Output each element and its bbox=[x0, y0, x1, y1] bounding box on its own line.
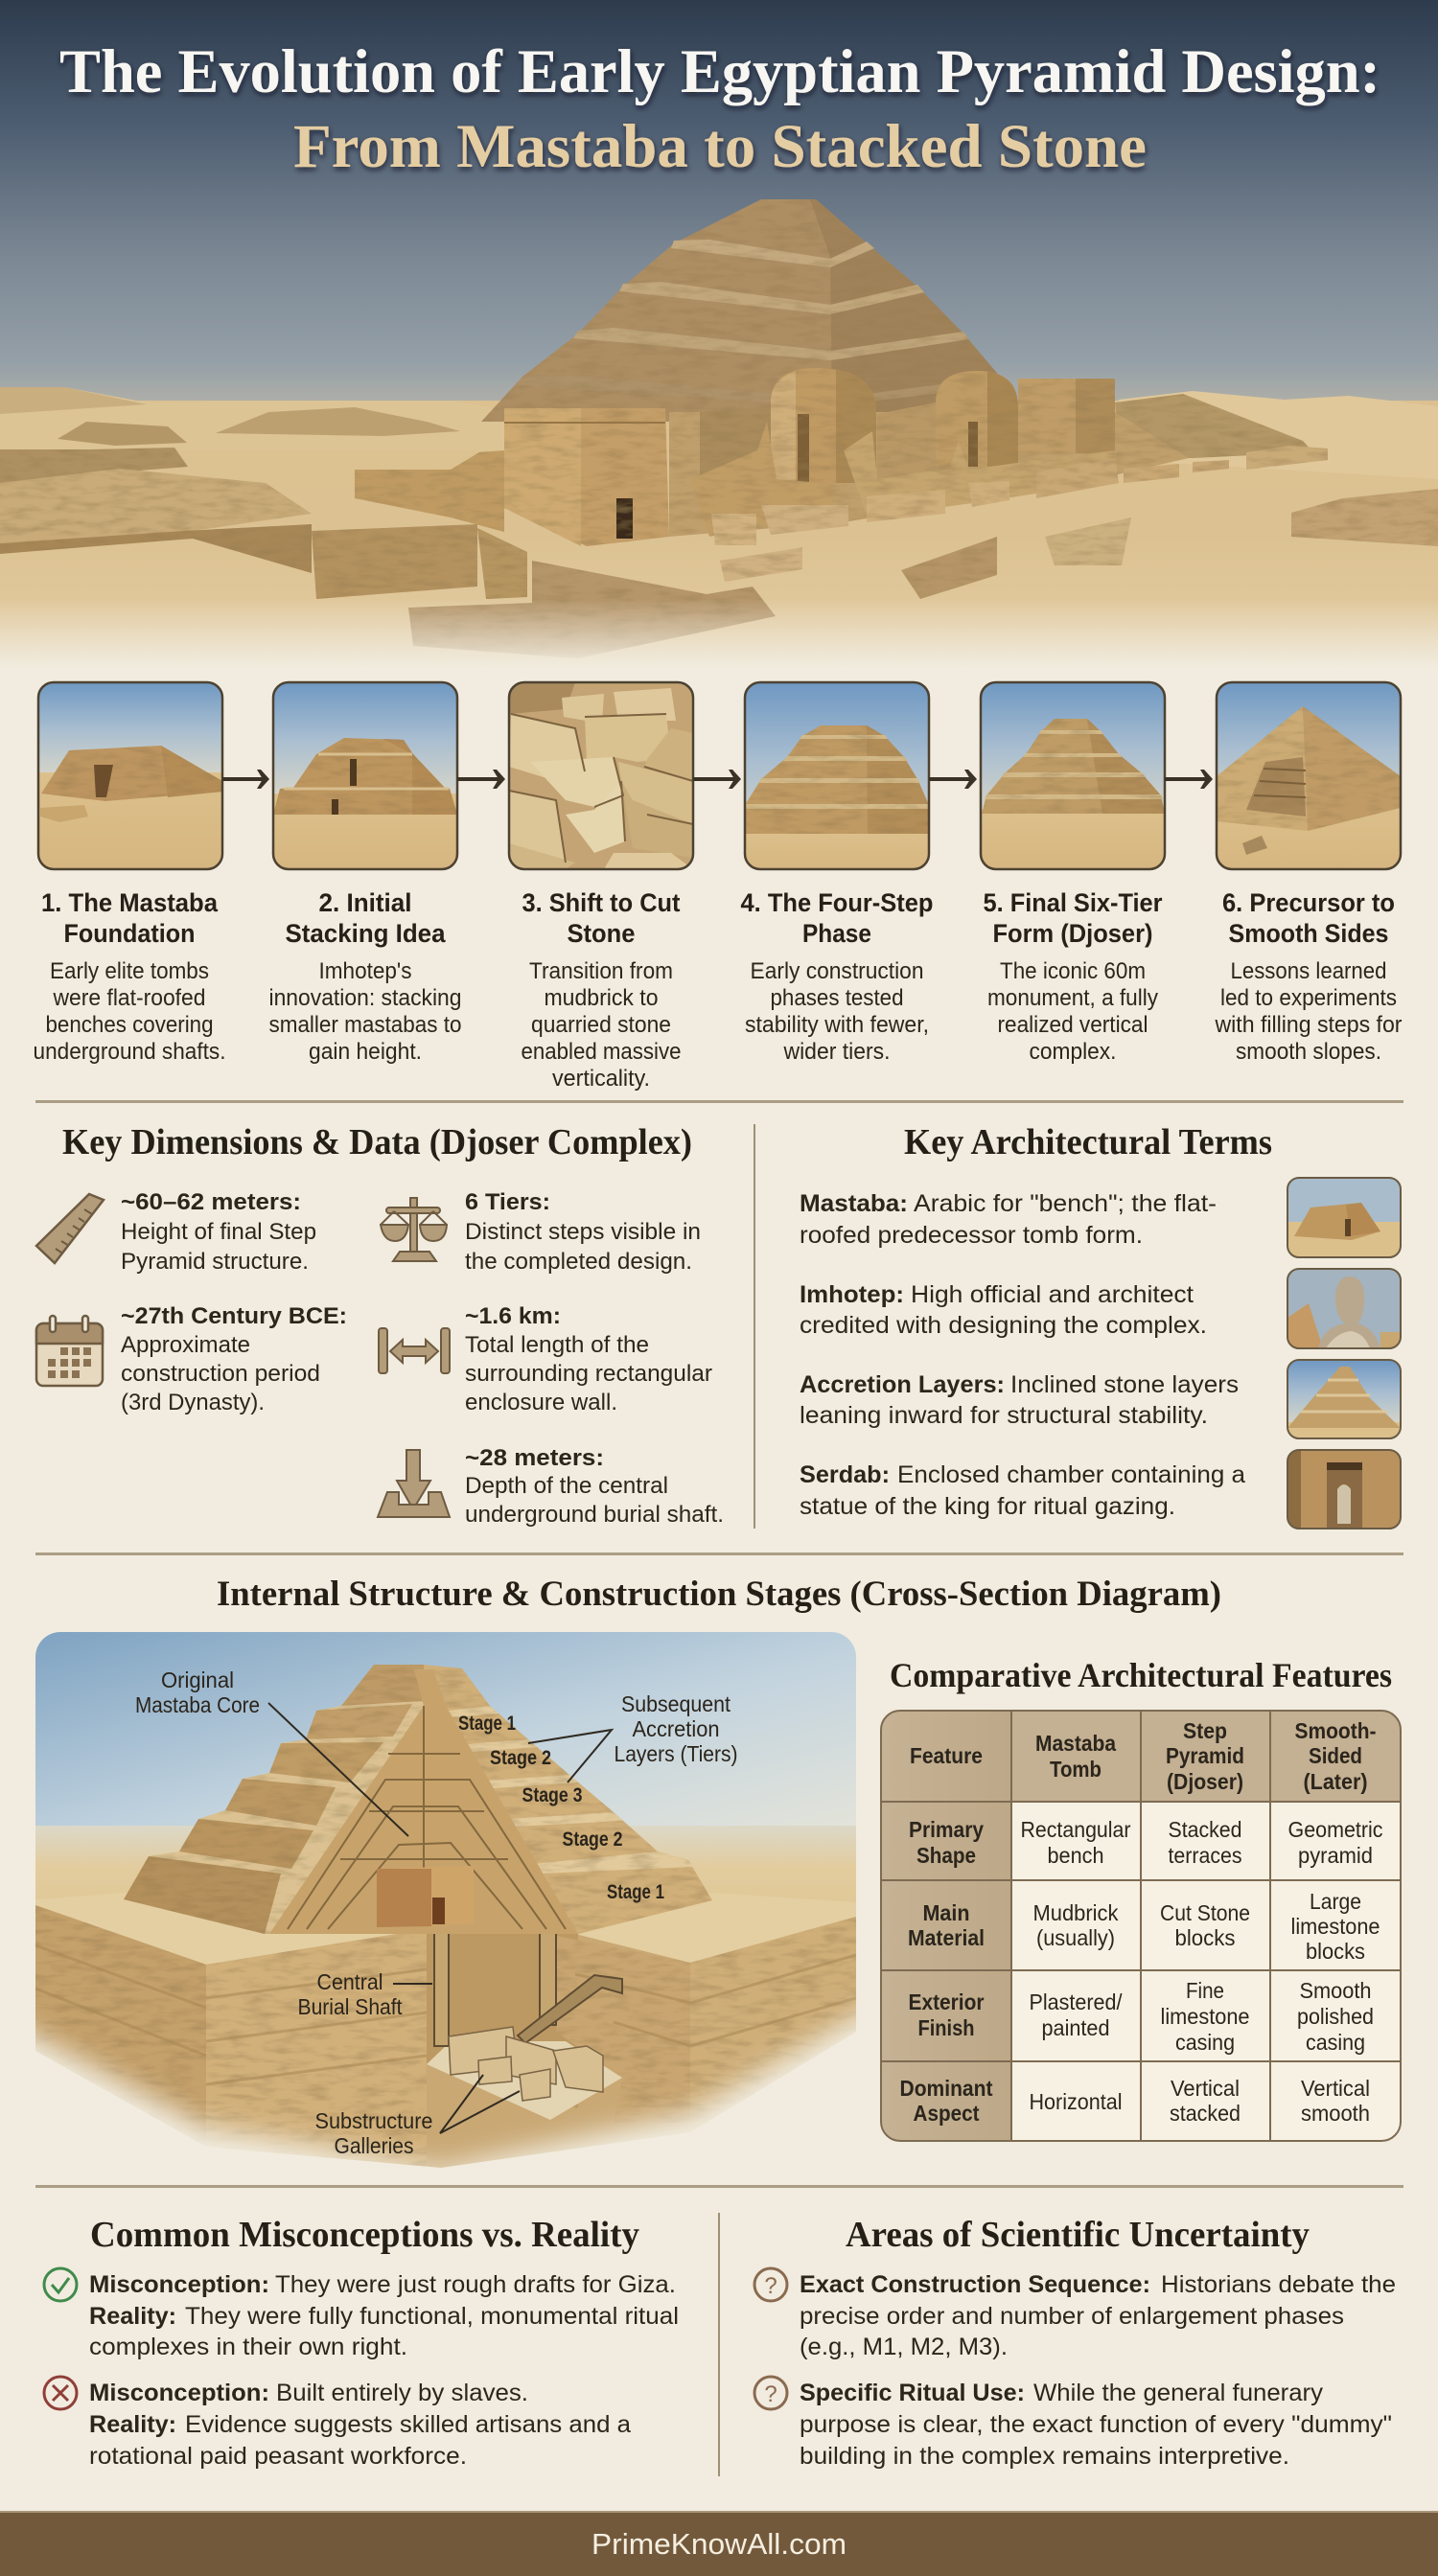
caption 1 bbox=[33, 888, 226, 1065]
stage 1 frame bbox=[38, 682, 222, 869]
table row: exterior finish bbox=[909, 1978, 1374, 2055]
stage labels: Stage 2 bbox=[490, 1747, 551, 1769]
item: height: Height of final Step bbox=[121, 1219, 316, 1245]
table header row: Pyramid bbox=[1166, 1743, 1244, 1768]
table row: dominant aspect: smooth bbox=[1301, 2101, 1370, 2126]
heading: uncertainty: Areas of Scientific Uncertainty bbox=[846, 2215, 1310, 2255]
title: From Mastaba to Stacked Stone bbox=[293, 112, 1147, 181]
bottom fade to page bbox=[0, 1998, 892, 2184]
caption 3: Stone bbox=[568, 919, 635, 948]
panel: comparison table bbox=[881, 1656, 1401, 2141]
table row: main material: Main bbox=[922, 1900, 970, 1925]
caption 5: 5. Final Six-Tier bbox=[984, 888, 1163, 917]
diagram scene bbox=[35, 1632, 856, 2175]
term: imhotep: High official and architect bbox=[911, 1281, 1194, 1308]
arrow 2 bbox=[457, 770, 505, 789]
table row: main material: Mudbrick bbox=[1033, 1900, 1119, 1925]
caption 3: Transition from bbox=[529, 958, 673, 984]
caption 3 bbox=[522, 888, 681, 1092]
table row: main material: Cut Stone bbox=[1160, 1900, 1250, 1925]
label: substructure galleries bbox=[314, 2108, 433, 2158]
table row: exterior finish: Finish bbox=[918, 2015, 974, 2040]
icon: ruler bbox=[36, 1194, 104, 1263]
icon: calendar bbox=[36, 1316, 103, 1386]
caption 1: Early elite tombs bbox=[50, 958, 209, 984]
table row: primary shape: Stacked bbox=[1168, 1817, 1242, 1842]
term: mastaba: Mastaba: bbox=[800, 1190, 908, 1217]
ground surface bbox=[35, 1893, 856, 1965]
item: tiers: Distinct steps visible in bbox=[465, 1219, 701, 1245]
uncertainty 2: purpose is clear, the exact function of every "dummy" bbox=[800, 2411, 1392, 2438]
label: substructure galleries: Galleries bbox=[334, 2133, 414, 2158]
front wall bbox=[206, 1929, 427, 2175]
item: tiers: the completed design. bbox=[465, 1249, 692, 1275]
term: accretion layers: Accretion Layers: bbox=[800, 1371, 1005, 1398]
stage labels: Stage 2 bbox=[562, 1828, 623, 1851]
caption 6: led to experiments bbox=[1220, 985, 1397, 1011]
misconception 1: They were just rough drafts for Giza. bbox=[275, 2271, 676, 2298]
misconception 1: complexes in their own right. bbox=[89, 2334, 407, 2360]
table row: dominant aspect: Vertical bbox=[1301, 2076, 1370, 2101]
arrow 4 bbox=[929, 770, 977, 789]
stage 4 frame bbox=[745, 682, 929, 869]
item: depth: ~28 meters: bbox=[465, 1445, 604, 1471]
table row: dominant aspect: stacked bbox=[1170, 2101, 1241, 2126]
item: period: (3rd Dynasty). bbox=[121, 1390, 265, 1415]
table row: primary shape: bench bbox=[1047, 1843, 1104, 1868]
cross-section diagram bbox=[35, 1632, 856, 2168]
caption 2: Stacking Idea bbox=[286, 919, 446, 948]
stage 3 thumbnail: cut stone blocks bbox=[509, 682, 693, 869]
right front wall bbox=[556, 1936, 690, 2123]
table row: dominant aspect: Horizontal bbox=[1030, 2089, 1122, 2114]
uncertainty 2: Specific Ritual Use: bbox=[800, 2380, 1025, 2406]
stepped pyramid bbox=[481, 199, 1031, 422]
table row: primary shape bbox=[909, 1817, 1382, 1868]
left outer wall bbox=[35, 1905, 206, 2122]
pyramid right half bbox=[424, 1665, 712, 1934]
heading: key terms: Key Architectural Terms bbox=[904, 1122, 1272, 1162]
uncertainty 1: precise order and number of enlargement phases bbox=[800, 2303, 1344, 2330]
icon: balance scale bbox=[381, 1198, 447, 1261]
far right wall bbox=[690, 1917, 856, 2166]
stage labels: Stage 1 bbox=[458, 1713, 516, 1735]
accretion lines bbox=[288, 1706, 566, 1929]
item: depth: Depth of the central bbox=[465, 1473, 668, 1499]
icon: width arrows bbox=[379, 1328, 450, 1373]
caption 4: stability with fewer, bbox=[745, 1012, 929, 1038]
heading: comparative features: Comparative Architectural Features bbox=[890, 1656, 1392, 1694]
caption 5: The iconic 60m bbox=[1000, 958, 1146, 984]
table header row: Tomb bbox=[1050, 1757, 1102, 1782]
stage 6 frame bbox=[1217, 682, 1401, 869]
uncertainty 1: (e.g., M1, M2, M3). bbox=[800, 2334, 1008, 2360]
caption 1: were flat-roofed bbox=[53, 985, 205, 1011]
caption 6 bbox=[1215, 888, 1403, 1065]
term: mastaba: Arabic for "bench"; the flat- bbox=[914, 1190, 1217, 1217]
table row: primary shape: Geometric bbox=[1288, 1817, 1382, 1842]
table header row: Smooth- bbox=[1294, 1718, 1377, 1743]
item: enclosure: enclosure wall. bbox=[465, 1390, 617, 1415]
stage 6 thumbnail: smoothed pyramid bbox=[1217, 682, 1401, 869]
wall strata bbox=[35, 1945, 856, 2084]
table row: exterior finish: Fine bbox=[1186, 1978, 1224, 2003]
table row: main material: blocks bbox=[1175, 1925, 1235, 1950]
term frame: mastaba bbox=[1287, 1178, 1401, 1257]
gallery floor bbox=[427, 2041, 622, 2120]
term thumbnail: pyramid bbox=[1287, 1360, 1401, 1438]
term: accretion layers: Inclined stone layers bbox=[1010, 1371, 1239, 1398]
title bbox=[59, 37, 1380, 181]
misconception 1 bbox=[89, 2271, 679, 2360]
panel: misconceptions bbox=[44, 2215, 679, 2470]
table row: main material: (usually) bbox=[1036, 1925, 1115, 1950]
table row: main material: Large bbox=[1310, 1889, 1361, 1914]
misconception 2: rotational paid peasant workforce. bbox=[89, 2443, 467, 2470]
caption 5: monument, a fully bbox=[987, 985, 1158, 1011]
table row: main material: limestone bbox=[1290, 1914, 1380, 1939]
item: height: ~60–62 meters: bbox=[121, 1189, 301, 1215]
stage labels: Stage 1 bbox=[607, 1881, 664, 1903]
item: tiers: 6 Tiers: bbox=[465, 1189, 550, 1215]
notch back wall bbox=[427, 1929, 578, 2108]
stage 2 frame bbox=[273, 682, 457, 869]
footer: PrimeKnowAll.com bbox=[591, 2527, 847, 2561]
leader lines bbox=[268, 1703, 612, 2133]
brick foreground ruins bbox=[0, 524, 776, 658]
panel: uncertainty bbox=[754, 2215, 1396, 2470]
stage 1 thumbnail: mastaba bbox=[38, 682, 222, 869]
arrow 1 bbox=[222, 770, 269, 789]
misconception 2: Misconception: bbox=[89, 2380, 269, 2406]
item: depth: underground burial shaft. bbox=[465, 1502, 724, 1528]
caption 3: enabled massive bbox=[522, 1039, 681, 1065]
table row: main material: blocks bbox=[1306, 1939, 1365, 1964]
heading: internal structure: Internal Structure & Construction Stages (Cross-Section Diagram) bbox=[217, 1575, 1221, 1614]
original mastaba core block bbox=[377, 1866, 474, 1927]
uncertainty 1: Exact Construction Sequence: bbox=[800, 2271, 1150, 2298]
label: accretion layers: Subsequent bbox=[621, 1691, 731, 1716]
stage 4 thumbnail: four-step pyramid bbox=[745, 682, 929, 869]
item: enclosure: surrounding rectangular bbox=[465, 1361, 712, 1387]
table header row: Feature bbox=[910, 1743, 983, 1768]
table row: primary shape: Rectangular bbox=[1020, 1817, 1131, 1842]
table row: exterior finish: Exterior bbox=[909, 1990, 985, 2014]
table row: dominant aspect: Dominant bbox=[899, 2076, 993, 2101]
label: accretion layers bbox=[614, 1691, 738, 1766]
caption 2: gain height. bbox=[309, 1039, 422, 1065]
term frame: imhotep bbox=[1287, 1269, 1401, 1348]
table header row: (Djoser) bbox=[1167, 1769, 1243, 1794]
icon: check bbox=[44, 2268, 77, 2301]
misconception 2 bbox=[89, 2380, 631, 2470]
term: accretion layers bbox=[800, 1371, 1239, 1429]
caption 1: Foundation bbox=[63, 919, 196, 948]
caption 3: verticality. bbox=[552, 1066, 650, 1092]
table lines bbox=[881, 1711, 1401, 2141]
term thumbnail: serdab door bbox=[1287, 1450, 1401, 1529]
term frame: serdab bbox=[1287, 1450, 1401, 1529]
caption 3: 3. Shift to Cut bbox=[522, 888, 681, 917]
table header row: Step bbox=[1183, 1718, 1227, 1743]
label: central burial shaft: Central bbox=[316, 1969, 383, 1994]
table header row bbox=[910, 1718, 1377, 1794]
stage 3 frame bbox=[509, 682, 693, 869]
distant mound and rock outcrops bbox=[0, 394, 1313, 543]
icon: question 1: ? bbox=[764, 2273, 777, 2299]
term: imhotep: Imhotep: bbox=[800, 1281, 904, 1308]
item: tiers bbox=[465, 1189, 701, 1275]
pyramid left half bbox=[124, 1665, 424, 1934]
caption 4: wider tiers. bbox=[783, 1039, 890, 1065]
term: mastaba bbox=[800, 1190, 1217, 1249]
stage 5 thumbnail: six-tier pyramid bbox=[981, 682, 1165, 869]
icon: depth arrow bbox=[378, 1450, 450, 1517]
table grid bbox=[881, 1711, 1401, 2141]
icon: cross bbox=[44, 2377, 77, 2409]
caption 5 bbox=[984, 888, 1163, 1065]
caption 1: 1. The Mastaba bbox=[41, 888, 219, 917]
misconception 2: Evidence suggests skilled artisans and a bbox=[185, 2411, 631, 2438]
panel: key terms bbox=[800, 1122, 1401, 1529]
caption 1: underground shafts. bbox=[33, 1039, 226, 1065]
term thumbnail: bust bbox=[1287, 1269, 1401, 1348]
table row: exterior finish: casing bbox=[1306, 2030, 1365, 2055]
misconception 1: Reality: bbox=[89, 2303, 176, 2330]
caption 6: 6. Precursor to bbox=[1222, 888, 1395, 917]
table row: exterior finish: casing bbox=[1175, 2030, 1235, 2055]
caption 6: Smooth Sides bbox=[1229, 919, 1388, 948]
table row: primary shape: terraces bbox=[1168, 1843, 1242, 1868]
caption 2: smaller mastabas to bbox=[268, 1012, 462, 1038]
caption 6: Lessons learned bbox=[1231, 958, 1386, 984]
table header row: Mastaba bbox=[1035, 1731, 1116, 1756]
item: period: ~27th Century BCE: bbox=[121, 1303, 347, 1329]
hero image: step pyramid complex bbox=[0, 0, 1438, 675]
item: height: Pyramid structure. bbox=[121, 1249, 309, 1275]
term frame: accretion bbox=[1287, 1360, 1401, 1438]
caption 5: complex. bbox=[1030, 1039, 1116, 1065]
caption 4: 4. The Four-Step bbox=[740, 888, 934, 917]
table row: primary shape: Shape bbox=[916, 1843, 976, 1868]
ancient ruin walls and gates bbox=[355, 368, 1438, 599]
label: central burial shaft: Burial Shaft bbox=[297, 1994, 403, 2019]
icon: question 2: ? bbox=[764, 2381, 777, 2407]
caption 3: quarried stone bbox=[531, 1012, 671, 1038]
table row: dominant aspect: Aspect bbox=[913, 2101, 980, 2126]
arrow 3 bbox=[693, 770, 741, 789]
table row: exterior finish: Plastered/ bbox=[1030, 1990, 1123, 2014]
timeline: six stages bbox=[33, 682, 1403, 1092]
uncertainty 2 bbox=[800, 2380, 1392, 2470]
caption 4: Phase bbox=[802, 919, 871, 948]
substructure galleries bbox=[449, 2027, 603, 2101]
table row: exterior finish: painted bbox=[1041, 2015, 1110, 2040]
label: accretion layers: Layers (Tiers) bbox=[614, 1741, 738, 1766]
caption 2 bbox=[268, 888, 462, 1065]
table row: exterior finish: limestone bbox=[1160, 2004, 1250, 2029]
table row: exterior finish: Smooth bbox=[1300, 1978, 1371, 2003]
table row: primary shape: Primary bbox=[909, 1817, 984, 1842]
label: original mastaba core: Original bbox=[161, 1668, 234, 1692]
label: accretion layers: Accretion bbox=[633, 1716, 719, 1741]
caption 2: 2. Initial bbox=[318, 888, 412, 917]
stage captions bbox=[33, 888, 1403, 1092]
caption 2: Imhotep's bbox=[318, 958, 412, 984]
uncertainty 1: Historians debate the bbox=[1161, 2271, 1396, 2298]
caption 5: Form (Djoser) bbox=[993, 919, 1152, 948]
caption 4: phases tested bbox=[771, 985, 903, 1011]
table row: exterior finish: polished bbox=[1297, 2004, 1374, 2029]
item: enclosure: Total length of the bbox=[465, 1332, 649, 1358]
item: period: construction period bbox=[121, 1361, 320, 1387]
pyramid cut face bbox=[269, 1669, 578, 1934]
caption 4 bbox=[740, 888, 934, 1065]
stage labels bbox=[458, 1713, 664, 1903]
caption 2: innovation: stacking bbox=[268, 985, 462, 1011]
table header row: (Later) bbox=[1304, 1769, 1367, 1794]
label: original mastaba core: Mastaba Core bbox=[135, 1692, 260, 1717]
misconception 1: They were fully functional, monumental ritual bbox=[185, 2303, 679, 2330]
term: serdab: Enclosed chamber containing a bbox=[897, 1461, 1245, 1488]
stage 2 thumbnail: stacked mastabas bbox=[273, 682, 457, 869]
item: period bbox=[121, 1303, 347, 1415]
table row: main material bbox=[908, 1889, 1380, 1964]
icon: question 1 bbox=[754, 2268, 787, 2301]
label: central burial shaft bbox=[297, 1969, 403, 2019]
term: serdab bbox=[800, 1461, 1245, 1520]
table row: primary shape: pyramid bbox=[1298, 1843, 1373, 1868]
stage 5 frame bbox=[981, 682, 1165, 869]
item: enclosure bbox=[465, 1303, 712, 1415]
title: The Evolution of Early Egyptian Pyramid Design: bbox=[59, 37, 1380, 106]
sloped passage bbox=[518, 1975, 622, 2043]
misconception 2: Reality: bbox=[89, 2411, 176, 2438]
term: imhotep: credited with designing the complex. bbox=[800, 1312, 1207, 1339]
term: accretion layers: leaning inward for structural stability. bbox=[800, 1402, 1208, 1429]
uncertainty 1 bbox=[800, 2271, 1396, 2360]
label: original mastaba core bbox=[135, 1668, 260, 1717]
table row: main material: Material bbox=[908, 1925, 985, 1950]
item: period: Approximate bbox=[121, 1332, 250, 1358]
caption 5: realized vertical bbox=[997, 1012, 1148, 1038]
icon: question 2 bbox=[754, 2377, 787, 2409]
term: mastaba: roofed predecessor tomb form. bbox=[800, 1222, 1143, 1249]
caption 6: with filling steps for bbox=[1215, 1012, 1403, 1038]
term: imhotep bbox=[800, 1281, 1207, 1339]
misconception 2: Built entirely by slaves. bbox=[276, 2380, 528, 2406]
caption 6: smooth slopes. bbox=[1236, 1039, 1381, 1065]
caption 1: benches covering bbox=[46, 1012, 213, 1038]
item: height bbox=[121, 1189, 316, 1275]
uncertainty 2: While the general funerary bbox=[1033, 2380, 1324, 2406]
caption 3: mudbrick to bbox=[545, 985, 658, 1011]
uncertainty 2: building in the complex remains interpretive. bbox=[800, 2443, 1289, 2470]
term: serdab: statue of the king for ritual gazing. bbox=[800, 1493, 1175, 1520]
table header row: Sided bbox=[1309, 1743, 1362, 1768]
front tower with door bbox=[504, 408, 669, 546]
term: serdab: Serdab: bbox=[800, 1461, 890, 1488]
stage labels: Stage 3 bbox=[522, 1784, 583, 1806]
caption 4: Early construction bbox=[750, 958, 924, 984]
panel: key dimensions bbox=[36, 1122, 724, 1528]
table row: dominant aspect: Vertical bbox=[1171, 2076, 1240, 2101]
footer bbox=[0, 2511, 1438, 2576]
arrow 5 bbox=[1165, 770, 1213, 789]
central burial shaft bbox=[434, 1923, 556, 2046]
item: depth bbox=[465, 1445, 724, 1528]
heading: misconceptions: Common Misconceptions vs. Reality bbox=[90, 2215, 639, 2255]
label: substructure galleries: Substructure bbox=[314, 2108, 433, 2133]
table row: dominant aspect bbox=[899, 2076, 1370, 2126]
item: enclosure: ~1.6 km: bbox=[465, 1303, 561, 1329]
misconception 1: Misconception: bbox=[89, 2271, 269, 2298]
heading: key dimensions: Key Dimensions & Data (Djoser Complex) bbox=[62, 1122, 692, 1162]
term thumbnail: mastaba bbox=[1287, 1178, 1401, 1257]
